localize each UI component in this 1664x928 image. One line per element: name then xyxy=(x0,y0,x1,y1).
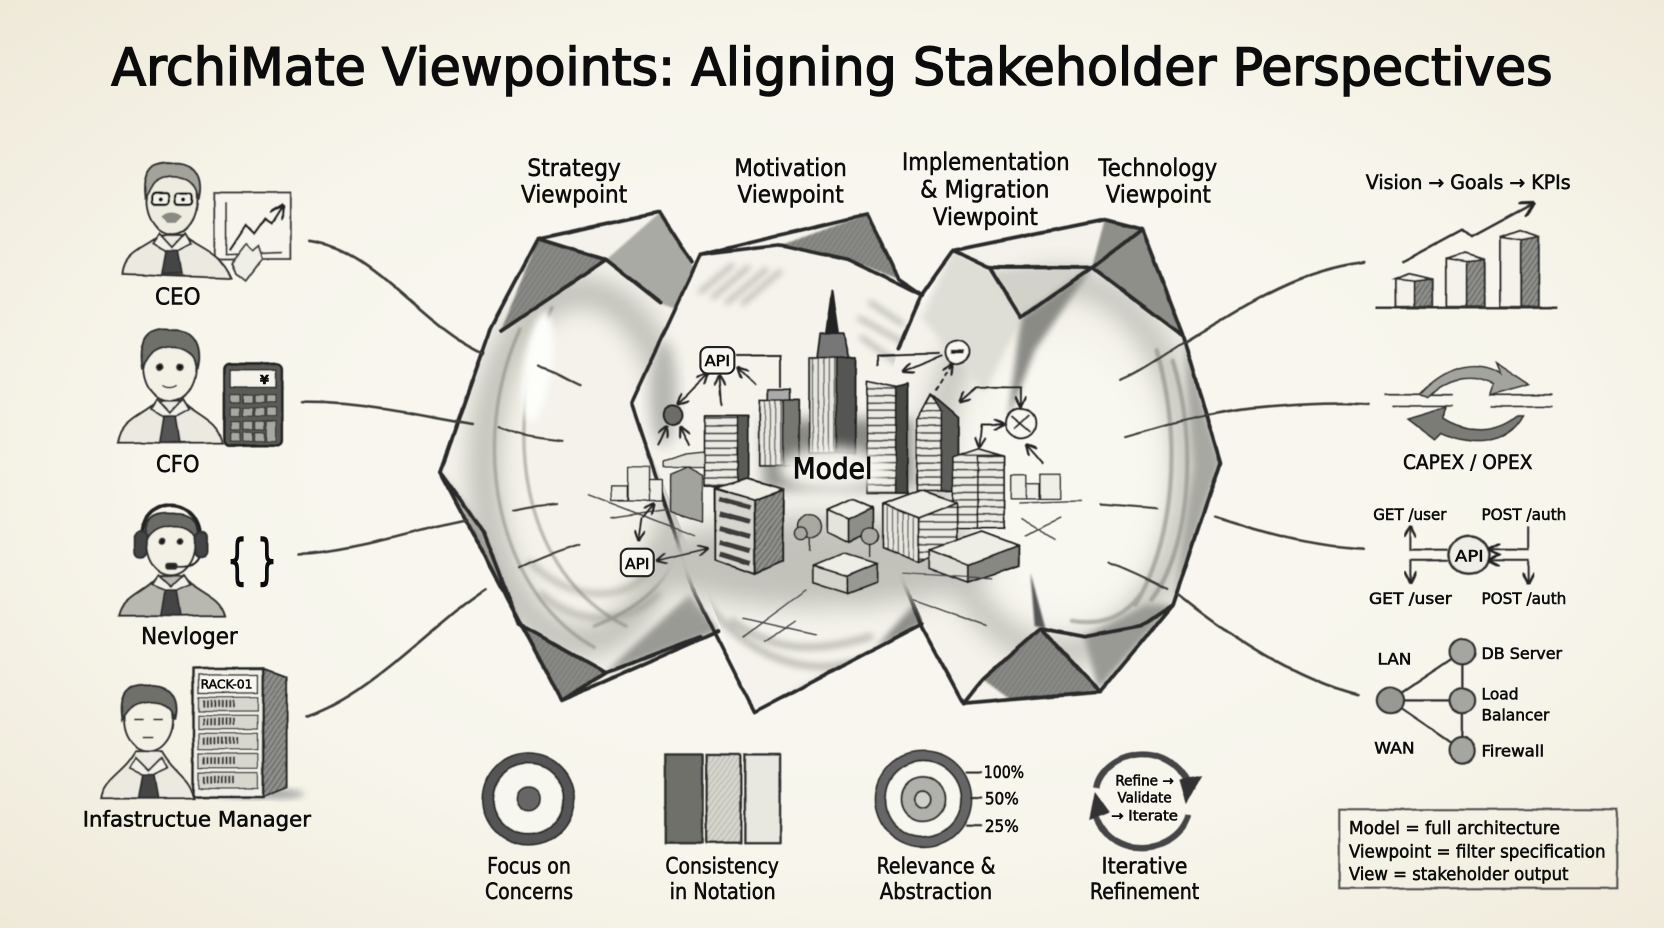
output: developer API xyxy=(1369,505,1566,608)
hub label: API xyxy=(1455,546,1484,565)
caption: in Notation xyxy=(670,879,776,905)
icon: calculator xyxy=(224,364,282,446)
name: CFO: CFO xyxy=(156,450,200,478)
output: CAPEX OPEX cycle xyxy=(1385,363,1553,474)
definition legend box: View = stakeholder output xyxy=(1349,864,1568,885)
tall right buildings xyxy=(867,381,1004,528)
ground shading xyxy=(642,518,992,607)
caption xyxy=(1090,853,1199,905)
bar chart with trend arrow xyxy=(1376,204,1558,308)
scale labels: 50% xyxy=(985,789,1019,809)
viewpoint heading: implementation and migration xyxy=(902,147,1070,231)
principle: consistency in notation xyxy=(665,755,780,905)
node labels: DB Server xyxy=(1481,644,1563,663)
output: vision goals KPIs xyxy=(1366,171,1571,308)
loop text: Validate xyxy=(1117,790,1172,806)
principle: iterative refinement xyxy=(1090,754,1201,905)
halo behind model label xyxy=(778,448,888,490)
icon: API hub xyxy=(1410,526,1528,583)
caption xyxy=(665,853,779,905)
icon: refresh loop xyxy=(1090,754,1201,848)
tall left buildings xyxy=(705,389,799,486)
icon: focus ring xyxy=(482,753,575,845)
gem: strategy viewpoint xyxy=(440,212,743,700)
caption xyxy=(877,853,995,905)
definition legend box: Viewpoint = filter specification xyxy=(1349,841,1606,862)
icon: curly braces: { } xyxy=(227,528,277,590)
caption: Focus on xyxy=(487,853,571,879)
server block xyxy=(715,479,783,574)
node labels: Firewall xyxy=(1481,742,1544,761)
caption: Concerns xyxy=(485,879,573,905)
icon: target rings with scale xyxy=(875,751,982,847)
person: CEO xyxy=(122,163,231,278)
caption: Relevance & xyxy=(877,853,995,879)
viewpoint heading: strategy xyxy=(521,153,627,209)
viewpoint heading: motivation xyxy=(734,153,847,209)
caption: CAPEX / OPEX xyxy=(1403,451,1532,474)
definition legend box: Model = full architecture xyxy=(1349,818,1560,839)
node labels: WAN xyxy=(1374,738,1415,757)
principle: relevance and abstraction xyxy=(875,751,1024,905)
person: developer with headset xyxy=(119,505,225,616)
endpoint labels: GET /user xyxy=(1369,589,1452,608)
viewpoint heading: motivation: Motivation xyxy=(734,153,847,182)
node labels xyxy=(1374,644,1563,761)
viewpoint heading: implementation and migration: Implementation xyxy=(902,147,1070,176)
main tower with spire xyxy=(810,291,855,453)
title: ArchiMate Viewpoints: Aligning Stakeholder Perspectives xyxy=(111,38,1553,98)
output: network topology xyxy=(1374,639,1563,763)
endpoint labels: POST /auth xyxy=(1481,505,1566,524)
caption: Iterative xyxy=(1102,853,1188,879)
viewpoint heading: strategy: Viewpoint xyxy=(521,180,627,209)
stakeholder: CEO xyxy=(122,163,291,311)
icon: two cycle arrows xyxy=(1385,363,1553,441)
gem: technology viewpoint xyxy=(865,220,1220,706)
low block buildings xyxy=(813,490,1019,593)
loop text xyxy=(1111,773,1178,824)
viewpoint heading: implementation and migration: Viewpoint xyxy=(933,202,1038,231)
connector lines: stakeholders to gems xyxy=(298,241,1369,716)
caption: Consistency xyxy=(665,853,779,879)
principle: focus on concerns xyxy=(482,753,575,905)
yen sign on calculator display: ¥ xyxy=(260,373,269,388)
person: CFO xyxy=(118,329,223,443)
node labels: Load xyxy=(1481,684,1519,703)
viewpoint heading: motivation: Viewpoint xyxy=(738,180,844,209)
api tag: upper xyxy=(700,347,734,374)
model label: Model xyxy=(793,452,872,486)
definition legend box xyxy=(1339,810,1617,888)
viewpoint heading: technology: Viewpoint xyxy=(1106,180,1211,209)
stakeholder: CFO xyxy=(118,329,282,478)
rack label: RACK-01 xyxy=(201,678,253,693)
endpoint labels: POST /auth xyxy=(1481,589,1566,608)
name: CEO: CEO xyxy=(155,283,201,311)
loop text: Refine → xyxy=(1115,773,1174,789)
viewpoint heading: technology: Technology xyxy=(1097,153,1217,182)
icon: server rack xyxy=(193,669,305,799)
node labels: Balancer xyxy=(1481,706,1550,725)
caption: Vision → Goals → KPIs xyxy=(1366,171,1571,194)
icon: presentation chart xyxy=(214,192,291,281)
caption xyxy=(485,853,573,905)
viewpoint heading: strategy: Strategy xyxy=(527,153,621,182)
api tag: lower: API xyxy=(625,555,649,573)
model city at centre xyxy=(588,291,1082,642)
node labels: LAN xyxy=(1377,649,1411,668)
loop text: → Iterate xyxy=(1111,808,1178,824)
stakeholder: developer xyxy=(119,505,277,650)
name: developer: Nevloger xyxy=(141,622,238,650)
scale labels xyxy=(984,763,1024,837)
viewpoint heading: technology xyxy=(1097,153,1217,209)
gem: motivation viewpoint xyxy=(631,214,934,712)
viewpoint gems: overlapping faceted lenses xyxy=(440,212,1220,712)
scale labels: 25% xyxy=(985,817,1019,837)
network icon: top API xyxy=(639,353,1043,560)
scale labels: 100% xyxy=(984,763,1024,783)
stakeholder: infrastructure manager xyxy=(83,669,311,833)
name: infrastructure manager: Infastructue Manager xyxy=(83,808,311,833)
caption: Abstraction xyxy=(880,879,992,905)
skyline shading xyxy=(764,419,913,488)
caption: Refinement xyxy=(1090,879,1199,905)
api tag: lower xyxy=(621,549,654,576)
trees xyxy=(795,515,879,557)
endpoint labels xyxy=(1369,505,1566,608)
api tag: upper: API xyxy=(705,352,730,370)
far buildings xyxy=(611,452,1060,522)
viewpoint heading: implementation and migration: & Migration xyxy=(920,174,1050,203)
icon: network nodes xyxy=(1376,639,1475,763)
street lines xyxy=(588,495,1082,642)
icon: three shaded bars xyxy=(665,755,780,843)
endpoint labels: GET /user xyxy=(1373,505,1447,524)
person: infrastructure manager xyxy=(101,685,194,798)
